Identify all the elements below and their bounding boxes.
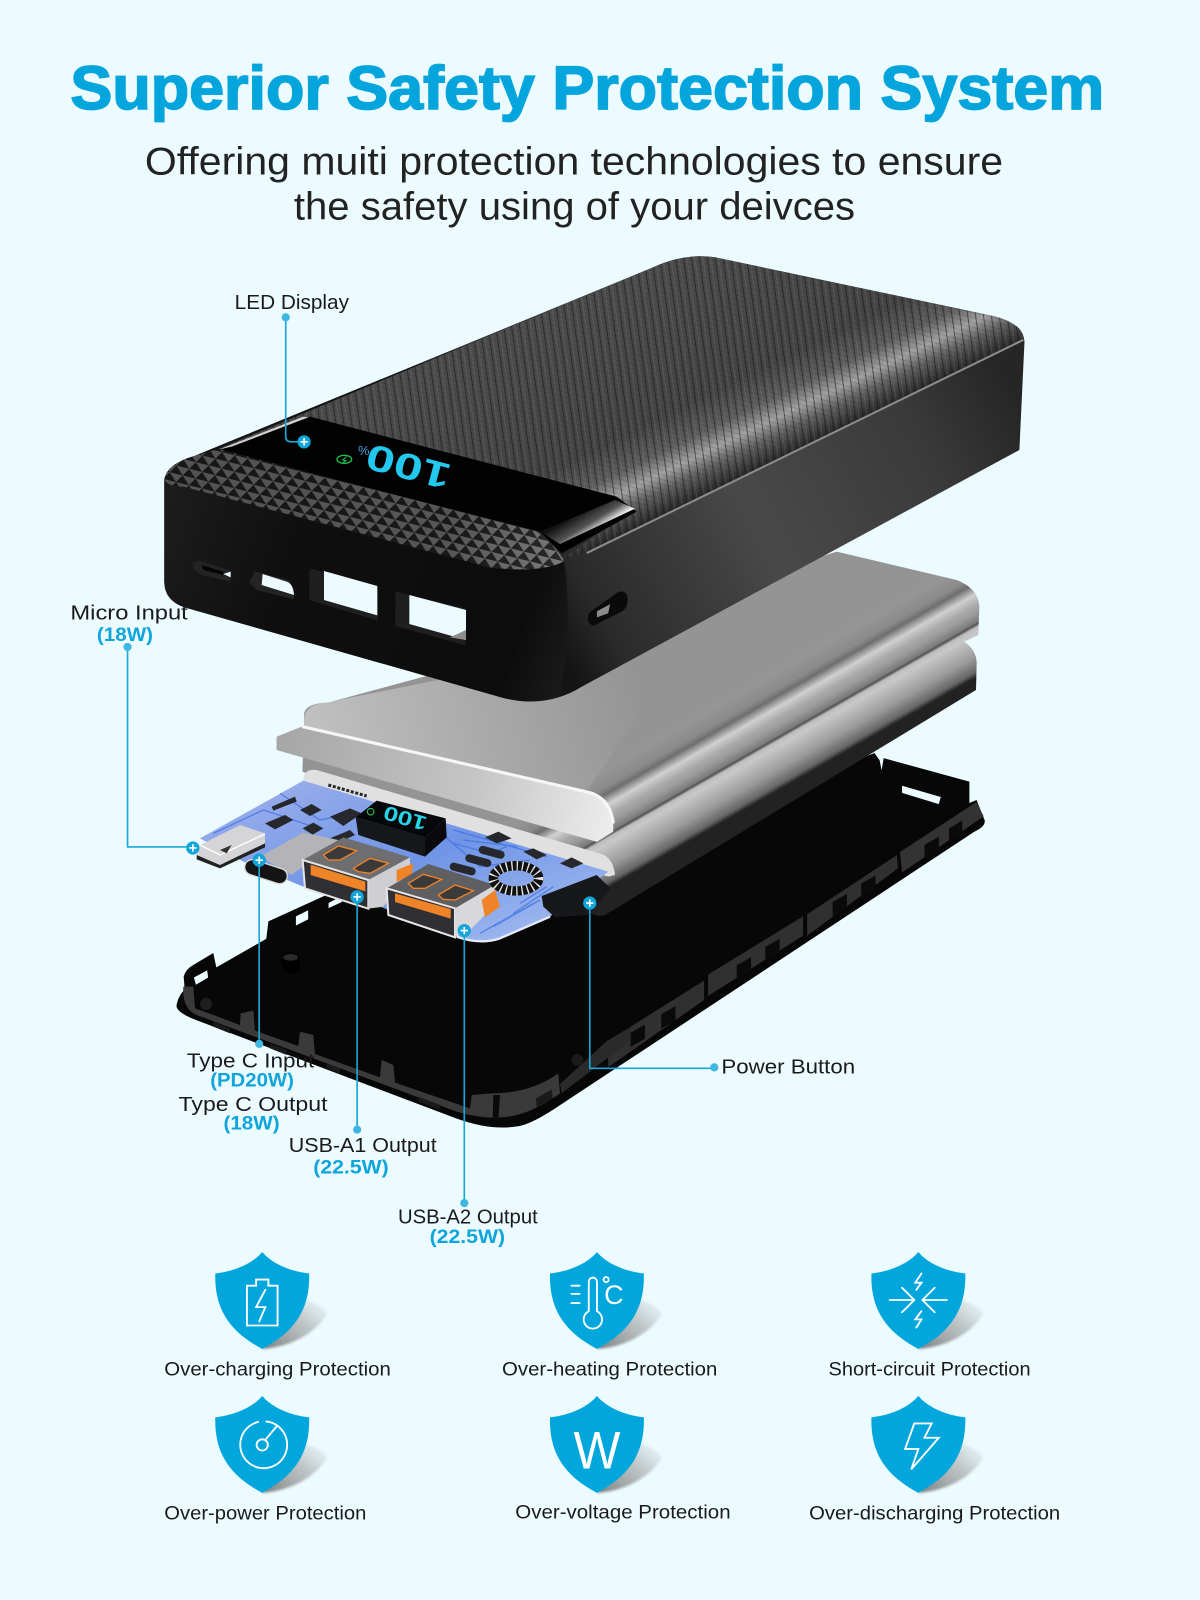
case silhouette and side face bbox=[164, 256, 1024, 701]
label: over-power: Over-power Protection bbox=[164, 1502, 366, 1524]
subtitle bbox=[145, 140, 1003, 228]
pcb traces bbox=[213, 793, 553, 933]
label: over-discharging: Over-discharging Protection bbox=[809, 1502, 1060, 1524]
battery body with streak highlights bbox=[302, 552, 979, 916]
label: short-circuit: Short-circuit Protection bbox=[829, 1359, 1031, 1381]
circuit board bbox=[197, 770, 615, 941]
icon: over-voltage shield bbox=[550, 1396, 662, 1493]
subtitle: Offering muiti protection technologies to ensure bbox=[145, 140, 1003, 183]
led module bbox=[356, 801, 447, 857]
front face bbox=[164, 480, 568, 702]
chips bbox=[265, 797, 583, 876]
icon: over-voltage shield: W bbox=[573, 1421, 620, 1480]
label: type c output bbox=[179, 1094, 328, 1135]
lower battery rim bbox=[303, 770, 615, 877]
label: over-charging: Over-charging Protection bbox=[164, 1359, 391, 1381]
usb-a2 port bbox=[387, 864, 500, 937]
tray cutouts bbox=[902, 786, 941, 804]
battery flap bbox=[277, 727, 613, 842]
label: power button: Power Button bbox=[721, 1056, 855, 1078]
micro usb connector bbox=[197, 825, 265, 868]
toroid coil bbox=[493, 866, 539, 891]
callout: type c bbox=[253, 854, 266, 1048]
power button bbox=[542, 875, 611, 917]
led module: 100 bbox=[381, 801, 430, 834]
icon: over-heating shield bbox=[550, 1252, 662, 1349]
tray body bbox=[176, 753, 985, 1128]
label: led display: LED Display bbox=[235, 292, 350, 314]
pcb edge bbox=[457, 917, 550, 941]
label: micro input bbox=[70, 602, 188, 646]
icon: over-discharging shield bbox=[871, 1396, 984, 1493]
icon: over-heating shield: C bbox=[604, 1280, 623, 1310]
lithium battery stack bbox=[277, 552, 979, 916]
display panel bbox=[219, 417, 637, 553]
right wall segments bbox=[608, 981, 704, 1067]
icon: over-charging shield bbox=[215, 1252, 328, 1349]
usb-a1 port bbox=[303, 837, 413, 909]
callout: micro input marker bbox=[186, 841, 199, 855]
front textured strip bbox=[164, 449, 564, 569]
lighter front of top face bbox=[304, 602, 714, 792]
label: type c input: (PD20W) bbox=[210, 1070, 294, 1092]
header pins bbox=[328, 785, 367, 796]
charging icon bbox=[337, 455, 352, 463]
label: over-heating: Over-heating Protection bbox=[502, 1359, 717, 1381]
label: type c output: Type C Output bbox=[179, 1094, 328, 1116]
icon: over-power shield bbox=[215, 1396, 328, 1493]
battery highlight bbox=[302, 727, 613, 823]
label: usb-a2 output bbox=[398, 1206, 538, 1248]
label: over-voltage: Over-voltage Protection bbox=[515, 1501, 731, 1523]
label: micro input: Micro Input bbox=[70, 602, 188, 624]
label: micro input: (18W) bbox=[97, 624, 153, 646]
subtitle: the safety using of your deivces bbox=[294, 185, 855, 228]
bottom tray of case bbox=[176, 753, 985, 1128]
label: usb-a1 output: (22.5W) bbox=[313, 1156, 389, 1178]
label: usb-a1 output: USB-A1 Output bbox=[289, 1135, 437, 1157]
callout: usb-a1 bbox=[351, 890, 364, 1134]
label: usb-a2 output: (22.5W) bbox=[430, 1226, 505, 1248]
label: type c input: Type C Input bbox=[187, 1050, 315, 1072]
title: Superior Safety Protection System bbox=[70, 54, 1104, 122]
label: type c output: (18W) bbox=[223, 1113, 280, 1135]
lower-left rim bbox=[183, 952, 630, 1120]
callout: micro input leader (behind case) bbox=[123, 643, 193, 847]
callout: led display bbox=[282, 313, 311, 448]
label: usb-a1 output bbox=[289, 1135, 437, 1178]
pcb bbox=[200, 781, 608, 941]
power bank top case bbox=[164, 256, 1024, 702]
icon: short-circuit shield bbox=[871, 1252, 984, 1349]
label: type c input bbox=[187, 1050, 315, 1092]
textured top surface bbox=[218, 256, 1023, 559]
type c connector bbox=[243, 833, 338, 886]
callout: power button bbox=[583, 896, 718, 1071]
type c port bbox=[249, 572, 294, 599]
battery percent: % bbox=[358, 443, 369, 457]
top edge highlight bbox=[587, 340, 1023, 553]
micro port bbox=[193, 561, 231, 582]
side port bbox=[588, 592, 628, 626]
label: usb-a2 output: USB-A2 Output bbox=[398, 1206, 538, 1228]
callout: usb-a2 bbox=[458, 924, 471, 1207]
port cutouts bbox=[193, 561, 466, 645]
usb-a port 1 bbox=[309, 568, 377, 621]
digital readout: 100 bbox=[362, 436, 455, 497]
usb-a port 2 bbox=[395, 592, 465, 645]
